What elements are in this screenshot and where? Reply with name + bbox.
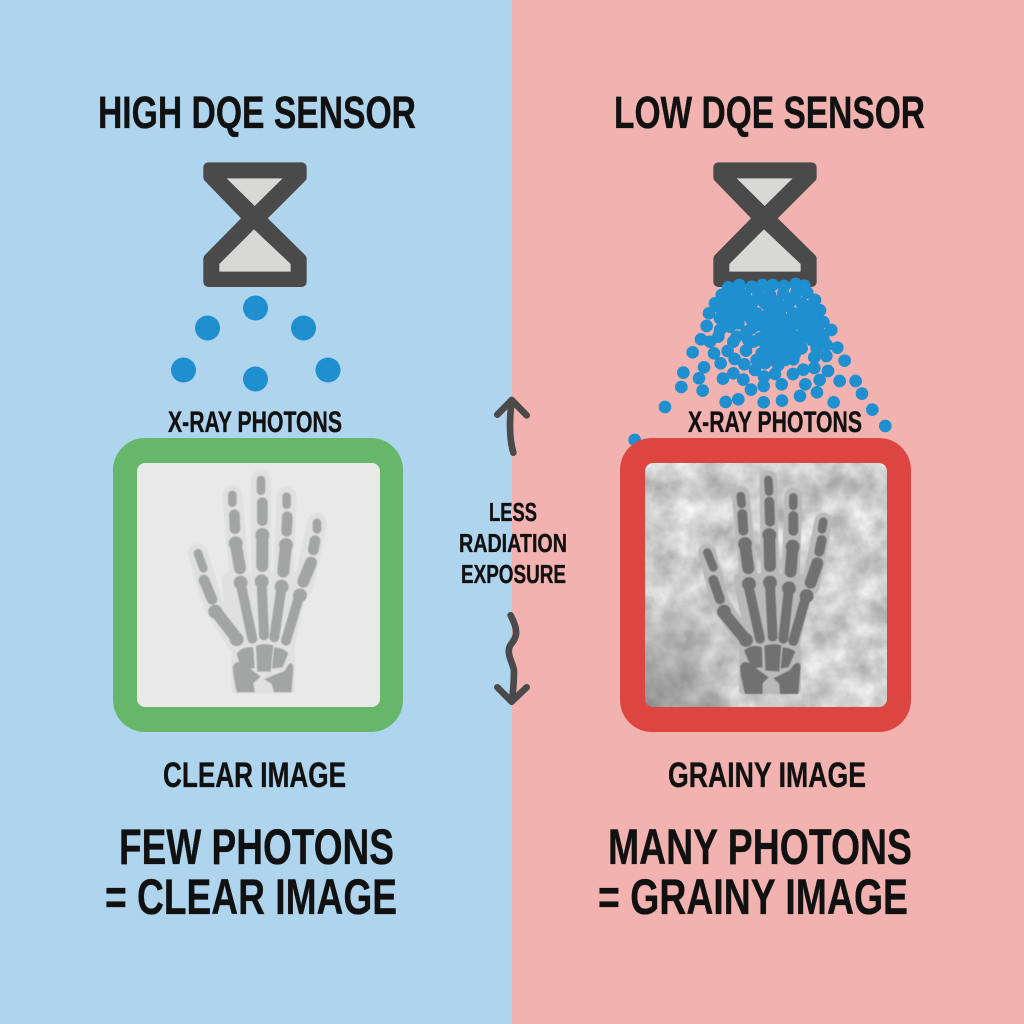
- center text: less radiation exposure: EXPOSURE: [461, 559, 566, 589]
- wrist bones: [233, 644, 293, 692]
- panel: green frame with clear x-ray: [113, 438, 403, 732]
- arrow: down wavy arrow: [497, 615, 527, 702]
- bone heads: [724, 535, 807, 640]
- image: grainy x-ray background: [645, 463, 887, 707]
- panel: high DQE background: [0, 0, 512, 1024]
- few photons: six blue dots: [171, 296, 340, 392]
- conclusion: few photons equals clear image: [105, 819, 397, 925]
- caption: grainy image: GRAINY IMAGE: [668, 756, 866, 795]
- many photons: dense spray of blue dots: [635, 284, 885, 440]
- image: grainy x-ray of hand: [707, 479, 823, 694]
- conclusion: few photons equals clear image: = CLEAR IMAGE: [105, 869, 397, 925]
- conclusion: many photons equals grainy image: MANY PHOTONS: [608, 819, 912, 875]
- caption: clear image: CLEAR IMAGE: [163, 756, 346, 795]
- icon: left hourglass x-ray source: [208, 167, 302, 282]
- conclusion: few photons equals clear image: FEW PHOTONS: [119, 819, 394, 875]
- bone heads: [215, 535, 300, 639]
- panel: red frame with grainy x-ray: [620, 438, 911, 732]
- label: x-ray photons left: X-RAY PHOTONS: [168, 406, 342, 439]
- wrist bones: [740, 644, 801, 694]
- center text: less radiation exposure: RADIATION: [459, 528, 567, 558]
- heading: high DQE sensor: HIGH DQE SENSOR: [98, 87, 416, 138]
- label: x-ray photons right: X-RAY PHOTONS: [688, 406, 862, 439]
- center text: less radiation exposure: [459, 497, 567, 589]
- conclusion: many photons equals grainy image: = GRAINY IMAGE: [598, 869, 908, 925]
- image: clear x-ray of hand: [198, 479, 317, 692]
- conclusion: many photons equals grainy image: [598, 819, 912, 925]
- icon: right hourglass x-ray source: [718, 167, 812, 282]
- center text: less radiation exposure: LESS: [489, 497, 537, 527]
- heading: low DQE sensor: LOW DQE SENSOR: [614, 87, 925, 138]
- arrow: up arrow: [497, 400, 527, 453]
- panel: low DQE background: [512, 0, 1024, 1024]
